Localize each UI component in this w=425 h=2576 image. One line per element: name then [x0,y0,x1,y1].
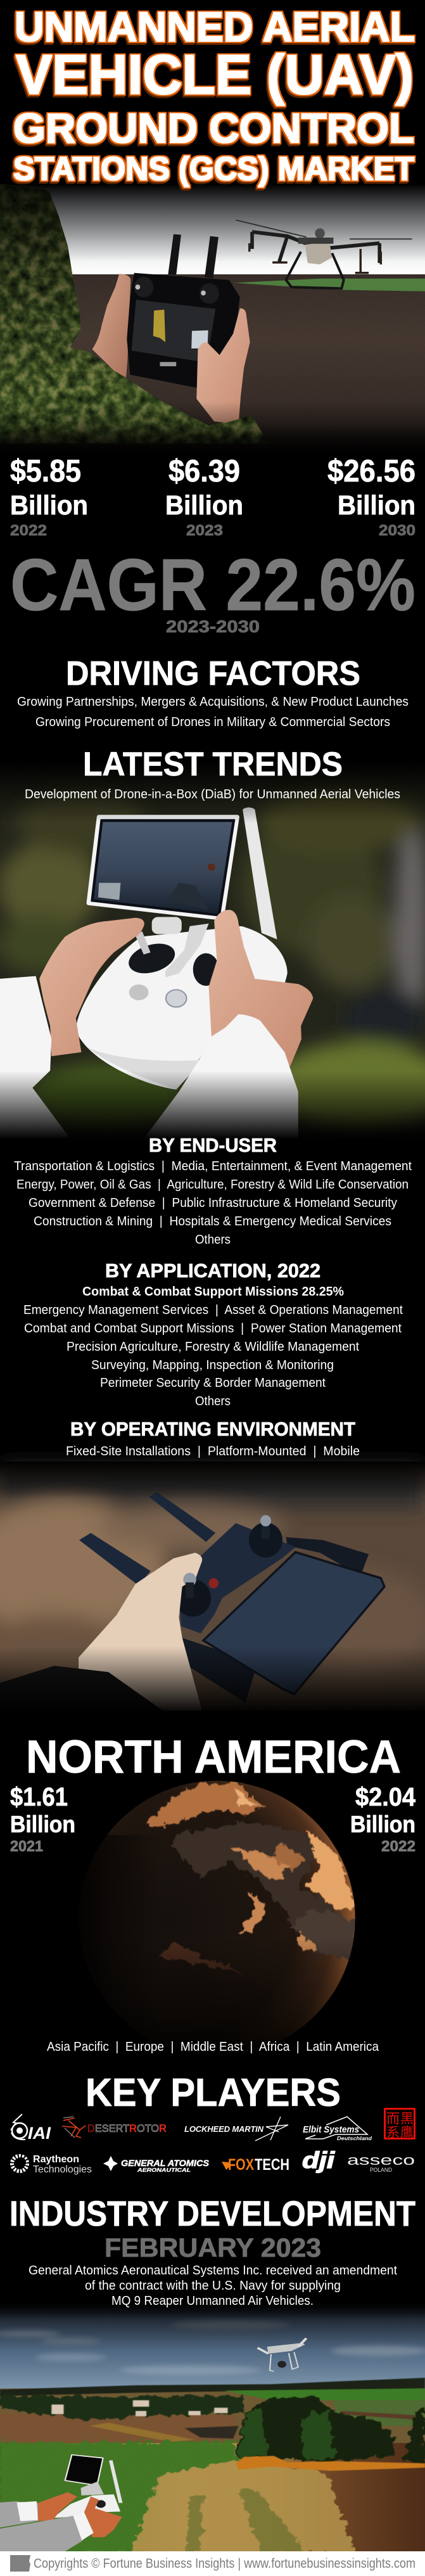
logo: Raytheon Technologies [12,2154,92,2175]
heading: by application: BY APPLICATION, 2022 [105,1259,320,1282]
title [13,3,415,188]
tablet screen [89,817,237,918]
fade to black under hero photo [0,424,425,456]
side clamps [181,1537,369,1702]
photo: white drone controller in hands [0,760,425,1139]
text: application list: Combat and Combat Support Missions | Power Station Management [24,1322,402,1336]
stat: 2022 market size: 2022 [10,522,47,539]
logo: red seal: 黑 [400,2112,414,2126]
text: end-user list: Government & Defense | Public Infrastructure & Homeland Security [29,1196,397,1210]
logo: Lockheed Martin: LOCKHEED MARTIN [184,2124,264,2134]
stat: 2023 market size [165,454,243,539]
footer bar [0,2551,425,2576]
stat: 2030 market size: $26.56 [327,454,415,488]
logo: Elbit Systems: Elbit Systems [303,2124,359,2135]
heading: by operating environment: BY OPERATING ENVIRONMENT [70,1418,355,1440]
logo: IAI [11,2114,51,2143]
stat: north america 2021: 2021 [10,1838,43,1855]
text: development description [29,2264,397,2308]
logo: Lockheed Martin [184,2117,288,2141]
title: STATIONS (GCS) MARKET [13,151,414,188]
stat: 2022 market size: Billion [10,490,88,521]
logo: Desert Rotor: DESERTROTOR [87,2122,167,2134]
heading: key players: KEY PLAYERS [86,2071,341,2115]
photo: landscape with drone and pilot [0,2302,425,2554]
tablet screen [203,1552,384,1694]
soldier in camouflage [0,184,271,444]
logo: Elbit Systems: Deutschland [337,2136,372,2141]
hand [79,1553,202,1711]
stat: north america 2022: 2022 [381,1838,415,1855]
logo: Raytheon Technologies: Raytheon [33,2154,79,2165]
text: driving factors list: Growing Procurement of Drones in Military & Commercial Sectors [35,715,390,729]
logo: Asseco Poland [347,2152,415,2173]
logo: Foxtech [222,2156,289,2174]
heading: development date: FEBRUARY 2023 [105,2233,321,2262]
drone controller [127,273,240,392]
left hand [39,918,144,1056]
controller body [175,1515,296,1633]
sleeve at right wrist [209,416,269,443]
CAGR figure: 2023-2030 [166,617,260,636]
orange shrub band [236,2456,425,2471]
logo: red seal: 而 [386,2112,400,2126]
icon: drone in flight [236,220,412,288]
stat: 2022 market size [10,454,88,539]
logo: red seal: 系 [386,2126,400,2140]
text: application list: Precision Agriculture, Forestry & Wildlife Management [67,1340,359,1354]
logo: Asseco Poland: POLAND [370,2167,392,2173]
text: driving factors list: Growing Partnerships, Mergers & Acquisitions, & New Product Launches [17,695,409,709]
text: application list: Perimeter Security & Border Management [100,1376,326,1390]
text: end-user list: Energy, Power, Oil & Gas | Agriculture, Forestry & Wild Life Conservation [16,1178,409,1192]
text: development description: General Atomics Aeronautical Systems Inc. received an amendment [29,2264,397,2278]
right sleeve [144,1014,298,1139]
stat: north america 2022: Billion [350,1811,415,1837]
image: planet globe [91,1780,355,2044]
logo: General Atomics Aeronautical [103,2156,210,2173]
hero photo: soldier with drone controller [0,184,425,456]
text: end-user list: Others [195,1233,231,1247]
thumb joystick [183,1573,196,1598]
text: development description: MQ 9 Reaper Unmanned Air Vehicles. [111,2294,314,2308]
heading: driving factors: DRIVING FACTORS [66,654,360,692]
controller antennas [168,234,219,278]
pilot hands [37,2492,122,2537]
drone [258,2338,307,2371]
heading: north america: NORTH AMERICA [26,1731,401,1783]
white controller body [76,917,288,1090]
right hand [209,910,313,1067]
title: GROUND CONTROL [13,105,414,151]
heading: latest trends: LATEST TRENDS [83,746,343,783]
background fields and village [0,2378,425,2449]
logo: red seal: 鹰 [400,2126,414,2140]
stat: north america 2021: $1.61 [10,1782,68,1811]
logo: General Atomics Aeronautical: AERONAUTICAL [137,2167,191,2173]
text: end-user list [14,1159,412,1247]
stat: 2030 market size: 2030 [379,522,415,539]
stat: north america 2021 [10,1782,75,1855]
stat: 2023 market size: 2023 [186,522,223,539]
tree line [236,2396,425,2464]
logo: Foxtech: FOX [228,2156,254,2174]
stat: 2030 market size [327,454,415,539]
stat: 2022 market size: $5.85 [10,454,81,488]
logo: Foxtech: TECH [255,2156,289,2174]
stat: north america 2022: $2.04 [355,1782,415,1811]
text: end-user list: Transportation & Logistics | Media, Entertainment, & Event Management [14,1159,412,1173]
stat: north america 2021: Billion [10,1811,75,1837]
text: latest trends item: Development of Drone-in-a-Box (DiaB) for Unmanned Aerial Vehicles [25,787,400,801]
logo: Desert Rotor [62,2117,167,2138]
title: VEHICLE (UAV) [16,43,414,106]
heading: by end-user: BY END-USER [149,1134,277,1156]
logo: Asseco Poland: asseco [347,2152,415,2168]
logo: DJI: dji [302,2147,335,2173]
text: development description: of the contract with the U.S. Navy for supplying [85,2279,341,2293]
callout: leading application share: Combat & Combat Support Missions 28.25% [82,1285,344,1299]
pilot tablet and controller [53,2455,122,2518]
text: operating environment list: Fixed-Site Installations | Platform-Mounted | Mobile [66,1444,360,1458]
logo: IAI: IAI [28,2124,51,2143]
foreground field [0,2441,425,2554]
text: application list: Emergency Management Services | Asset & Operations Management [23,1303,403,1317]
antenna [243,807,277,940]
antennas [79,1492,215,1585]
left hand [92,274,130,378]
title: UNMANNED AERIAL [15,3,415,50]
text: application list [23,1303,403,1408]
icon: Fortune Business Insights logo [10,2555,30,2572]
stat: 2030 market size: Billion [338,490,415,521]
text: application list: Others [195,1394,231,1408]
text: driving factors list [17,695,409,729]
logo: Elbit Systems [303,2117,372,2141]
text: end-user list: Construction & Mining | Hospitals & Emergency Medical Services [34,1215,391,1228]
text: other regions: Asia Pacific | Europe | Middle East | Africa | Latin America [47,2040,379,2054]
logo: Raytheon Technologies: Technologies [33,2164,92,2175]
stat: 2023 market size: $6.39 [168,454,240,488]
stat: north america 2022 [350,1782,415,1855]
photo: hand holding dark drone controller [0,1462,425,1717]
sleeve [0,1666,163,1711]
left sleeve [0,976,70,1139]
stat: 2023 market size: Billion [165,490,243,521]
text: application list: Surveying, Mapping, Inspection & Monitoring [91,1358,334,1372]
logo: General Atomics Aeronautical: GENERAL ATOMICS [121,2158,210,2168]
pilot sleeves [0,2501,92,2552]
logo: red seal [384,2108,415,2140]
right hand [196,309,250,424]
